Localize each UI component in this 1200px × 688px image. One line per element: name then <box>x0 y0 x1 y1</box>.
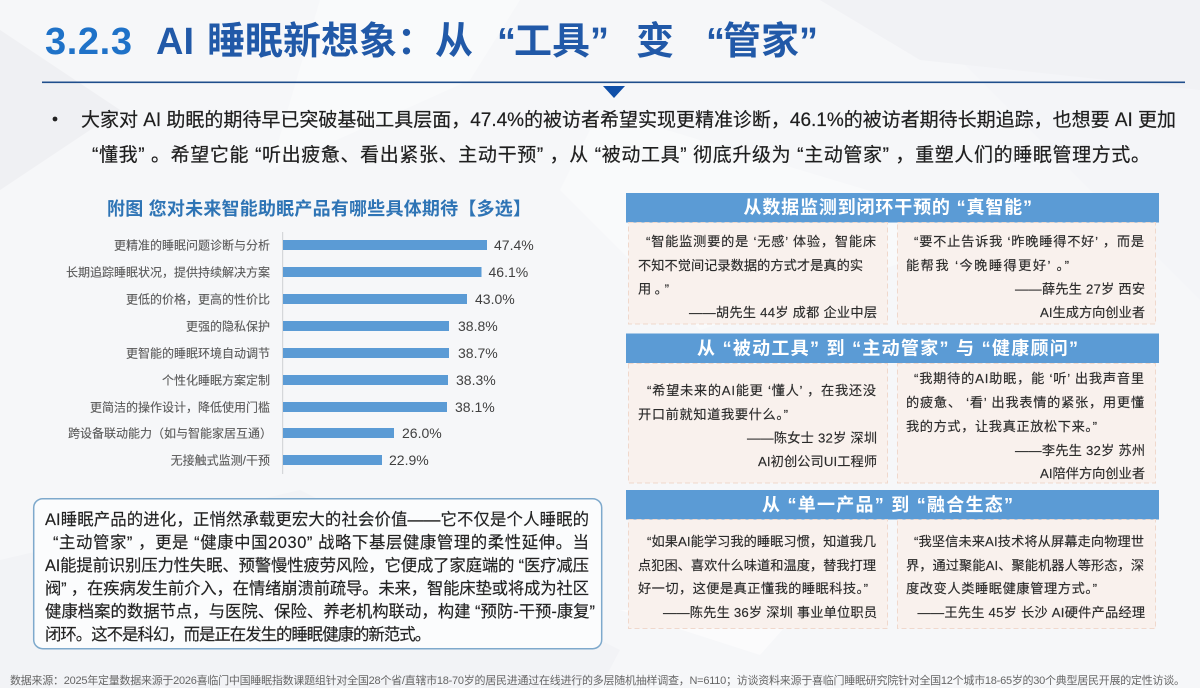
bar: 更智能的睡眠环境自动调节 <box>126 345 498 361</box>
title: 睡眠新想象：从 <box>207 21 473 63</box>
quote: 陈女士 <box>628 364 888 483</box>
bar: 更智能的睡眠环境自动调节: 38.7% <box>458 345 498 361</box>
bar: 长期追踪睡眠状况: 长期追踪睡眠状况，提供持续解决方案 <box>66 264 270 280</box>
quote: 李先生 <box>898 364 1156 483</box>
quote: 陈先生: 点犯困、喜欢什么味道和温度，替我打理 <box>638 558 876 573</box>
bar: 跨设备联动能力 <box>68 425 442 441</box>
quote: 王先生 <box>898 520 1156 628</box>
quote: 薛先生: “要不止告诉我 ‘昨晚睡得不好’ ，而是 <box>914 233 1144 249</box>
panel: 主动管家与健康顾问 <box>626 334 1159 483</box>
bar: 无接触式监测/干预 <box>171 452 429 468</box>
panel: 真智能 <box>626 193 1159 324</box>
quote: 李先生: AI陪伴方向创业者 <box>1040 466 1145 481</box>
quote: 陈先生: 好一切，这便是真正懂我的睡眠科技。” <box>638 580 868 596</box>
quote: 王先生: “我坚信未来AI技术将从屏幕走向物理世 <box>914 534 1144 549</box>
header: 从 “被动工具” 到 “主动管家” 与 “健康顾问” <box>697 338 1078 358</box>
bar: 更低的价格: 更低的价格，更高的性价比 <box>126 292 270 306</box>
intro bullet text: “懂我” 。希望它能 “听出疲惫、看出紧张、主动干预” ，从 “被动工具” 彻底升级为 “主动管家” ，重塑人们的睡眠管理方式。 <box>92 144 1150 166</box>
bar: 更强的隐私保护 <box>186 318 498 334</box>
title: 工具 <box>514 21 590 63</box>
quote: 陈先生 <box>628 520 888 628</box>
title: AI <box>156 21 194 63</box>
intro bullet text: 大家对 AI 助眠的期待早已突破基础工具层面，47.4%的被访者希望实现更精准诊断，46.1%的被访者期待长期追踪，也想要 AI 更加 <box>81 109 1176 131</box>
bar: 更简洁的操作设计: 更简洁的操作设计，降低使用门槛 <box>90 400 270 414</box>
title: “ <box>706 21 725 63</box>
quote: 陈女士: AI初创公司UI工程师 <box>758 454 877 469</box>
bar: 更强的隐私保护: 更强的隐私保护 <box>186 318 270 334</box>
quote: 陈先生: “如果AI能学习我的睡眠习惯，知道我几 <box>647 533 876 549</box>
bar: 更低的价格: 43.0% <box>475 291 515 307</box>
quote: 王先生: ——王先生 45岁 长沙 AI硬件产品经理 <box>918 605 1145 620</box>
header: 从 “单一产品” 到 “融合生态” <box>762 494 1013 515</box>
bar: 长期追踪睡眠状况 <box>66 264 528 280</box>
quote: 胡先生: 用。” <box>638 282 669 296</box>
header: 从数据监测到闭环干预的 “真智能” <box>744 196 1032 218</box>
bar: 更简洁的操作设计 <box>90 399 495 415</box>
callout: social value summary <box>34 499 602 649</box>
quote: 陈女士: 开口前就知道我要什么。” <box>638 406 788 422</box>
title: 3.2.3 <box>45 21 132 63</box>
callout: social value summary: AI能提前识别压力性失眠、预警慢性疲劳风险，它便成了家庭端的 “医疗减压 <box>45 557 589 575</box>
bar: 更精准的睡眠问题诊断与分析 <box>114 237 534 253</box>
bar: 更强的隐私保护: 38.8% <box>458 318 498 334</box>
header <box>626 193 1159 222</box>
bar: 个性化睡眠方案定制: 个性化睡眠方案定制 <box>162 372 270 388</box>
quote: 胡先生 <box>628 222 888 324</box>
quote: 薛先生: ——薛先生 27岁 西安 <box>1015 282 1145 296</box>
quote: 陈先生: ——陈先生 36岁 深圳 事业单位职员 <box>663 604 877 620</box>
quote: 李先生: “我期待的AI助眠，能 ‘听’ 出我声音里 <box>914 370 1144 386</box>
bar: 更低的价格 <box>126 291 515 307</box>
bar: 更精准的睡眠问题诊断与分析: 47.4% <box>494 237 534 253</box>
header <box>626 334 1159 363</box>
bar: 更精准的睡眠问题诊断与分析: 更精准的睡眠问题诊断与分析 <box>114 238 270 252</box>
title: 变 <box>636 21 674 63</box>
intro bullet text <box>53 109 1176 166</box>
title: 管家 <box>723 21 799 63</box>
quote: 陈女士: “希望未来的AI能更 ‘懂人’ ，在我还没 <box>647 383 876 398</box>
quote: 薛先生: 能帮我 ‘今晚睡得更好’ 。” <box>906 257 1069 273</box>
title: “ <box>497 21 516 63</box>
bar: 长期追踪睡眠状况: 46.1% <box>488 264 528 280</box>
quote: 王先生: 度改变人类睡眠健康管理方式。” <box>906 580 1097 596</box>
bar: 无接触式监测/干预: 22.9% <box>389 452 429 468</box>
footnote: data source: 数据来源：2025年定量数据来源于2026喜临门中国睡眠指数课题组针对全国28个省/直辖市18-70岁的居民进通过在线进行的多层随机抽样调查，N=6110；访谈资料来源于喜临门睡眠研究院针对全国12个城市18-65岁的30个典型居民开展的定性访谈。 <box>10 673 1185 687</box>
callout: social value summary: 闭环。这不是科幻，而是正在发生的睡眠健康的新范式。 <box>45 626 431 644</box>
quote: 胡先生: 不知不觉间记录数据的方式才是真的实 <box>638 257 863 273</box>
chart title: 附图 您对未来智能助眠产品有哪些具体期待【多选】 <box>107 198 531 219</box>
bar chart <box>66 232 534 474</box>
quote: 薛先生 <box>898 222 1156 324</box>
bar: 个性化睡眠方案定制: 38.3% <box>456 372 496 388</box>
quote: 李先生: ——李先生 32岁 苏州 <box>1015 443 1145 458</box>
panel: 融合生态 <box>626 490 1159 628</box>
quote: 薛先生: AI生成方向创业者 <box>1040 305 1145 320</box>
callout: social value summary: AI睡眠产品的进化，正悄然承载更宏大的社会价值——它不仅是个人睡眠的 <box>45 511 589 529</box>
title <box>45 21 818 63</box>
quote: 李先生: 的疲惫、 ‘看’ 出我表情的紧张，用更懂 <box>906 394 1144 410</box>
title: ” <box>799 21 818 63</box>
bar: 个性化睡眠方案定制 <box>162 372 496 388</box>
title: ” <box>590 21 609 63</box>
callout: social value summary: “主动管家” ，更是 “健康中国2030” 战略下基层健康管理的柔性延伸。当 <box>53 534 589 552</box>
title rule with pointer <box>42 82 1185 98</box>
bar: 更简洁的操作设计: 38.1% <box>455 399 495 415</box>
header <box>626 490 1159 520</box>
quote: 胡先生: ——胡先生 44岁 成都 企业中层 <box>689 304 877 320</box>
callout: social value summary: 健康档案的数据节点，与医院、保险、养老机构联动，构建 “预防-干预-康复” <box>45 603 595 621</box>
quote: 王先生: 界，通过聚能AI、聚能机器人等形态，深 <box>906 557 1144 573</box>
bar: 无接触式监测/干预: 无接触式监测/干预 <box>171 452 270 468</box>
callout: social value summary: 阀” ，在疾病发生前介入，在情绪崩溃前疏导。未来，智能床垫或将成为社区 <box>45 580 589 598</box>
quote: 胡先生: “智能监测要的是 ‘无感’ 体验，智能床 <box>646 233 876 249</box>
bar: 跨设备联动能力: 26.0% <box>402 425 442 441</box>
bar: 更智能的睡眠环境自动调节: 更智能的睡眠环境自动调节 <box>126 346 270 360</box>
quote: 陈女士: ——陈女士 32岁 深圳 <box>747 430 877 446</box>
bar: 跨设备联动能力: 跨设备联动能力（如与智能家居互通） <box>68 426 272 440</box>
quote: 李先生: 我的方式，让我真正放松下来。” <box>906 419 1097 434</box>
